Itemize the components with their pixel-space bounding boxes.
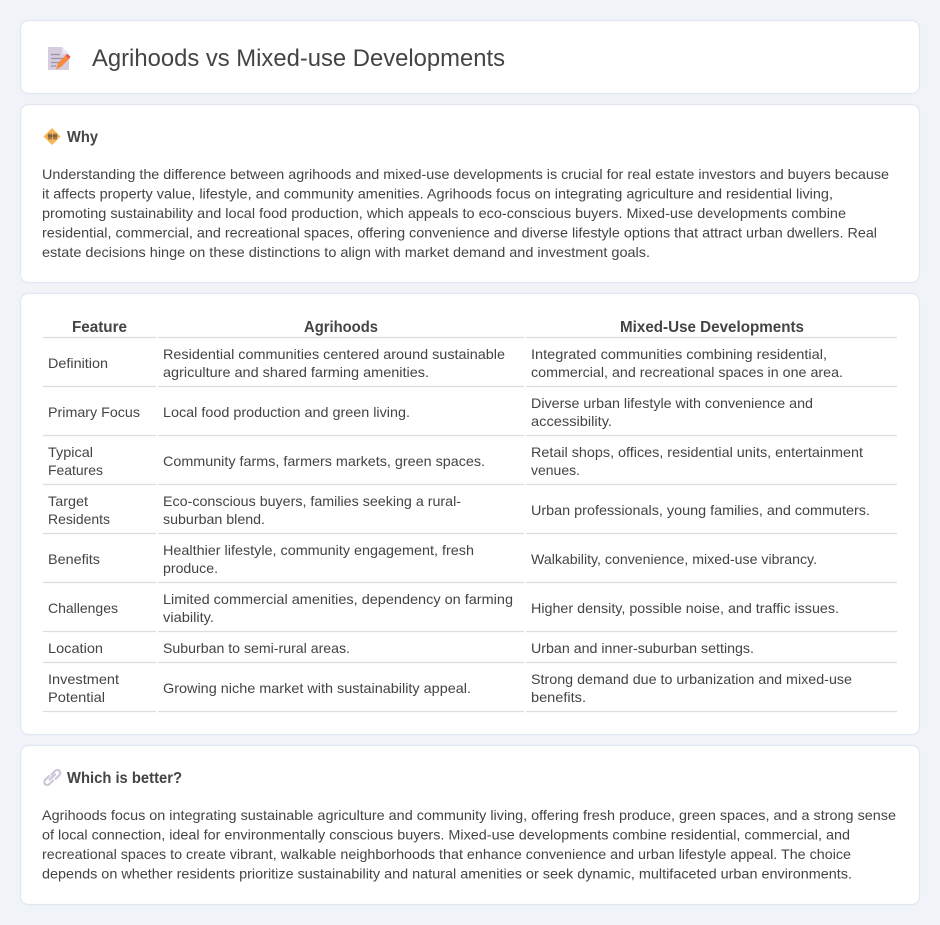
row: benefits: Benefits — [48, 551, 100, 567]
table header row: Mixed-Use Developments — [620, 319, 804, 336]
text block: which is better paragraph — [42, 807, 896, 882]
row: primary focus: Local food production and green living. — [163, 404, 410, 420]
text block: which is better paragraph: of local connection, ideal for environmentally conscious buyers. Mixed-use developments combine residential, commercial, and — [42, 826, 850, 842]
row: target residents — [43, 493, 897, 534]
row: target residents: suburban blend. — [163, 511, 265, 527]
row: target residents: Residents — [48, 511, 110, 527]
row: location — [43, 640, 897, 662]
row: benefits — [43, 542, 897, 582]
table header row: Feature — [72, 319, 127, 336]
row: typical features: venues. — [531, 462, 580, 478]
row: benefits: produce. — [163, 560, 218, 576]
row: definition: Integrated communities combining residential, — [531, 346, 827, 362]
row: primary focus: accessibility. — [531, 413, 612, 429]
panel: comparison table — [20, 294, 920, 734]
row: investment potential: Growing niche market with sustainability appeal. — [163, 680, 471, 696]
icon: orange diamond sign — [44, 128, 60, 145]
text block: why paragraph: estate decisions hinge on these distinctions to align with market demand and investment goals. — [42, 244, 650, 260]
row: definition: agriculture and shared farming amenities. — [163, 364, 429, 380]
text block: which is better paragraph: depends on whether residents prioritize sustainability and natural amenities or seek dynamic, multifaceted urban environments. — [42, 866, 852, 882]
row: definition: commercial, and recreational spaces in one area. — [531, 364, 843, 380]
icon: memo with pencil — [48, 47, 70, 70]
row: typical features: Community farms, farmers markets, green spaces. — [163, 453, 485, 469]
text block: which is better paragraph: Agrihoods focus on integrating sustainable agriculture and community living, offering fresh produce, green spaces, and a strong sense — [42, 807, 896, 823]
row: investment potential — [43, 671, 897, 712]
row: challenges: viability. — [163, 609, 214, 625]
panel: which is better — [20, 746, 920, 904]
table header row — [43, 319, 897, 338]
table header row: Agrihoods — [304, 319, 378, 336]
text block: why paragraph: residential, commercial, and recreational spaces, offering convenience and diverse lifestyle options that attract urban dwellers. Real — [42, 224, 877, 240]
text block: which is better paragraph: recreational spaces to create vibrant, walkable neighborhoods that enhance convenience and urban lifestyle appeal. The choice — [42, 846, 851, 862]
row: typical features — [43, 444, 897, 484]
panel: title header — [20, 20, 920, 94]
row: investment potential: Strong demand due to urbanization and mixed-use — [531, 671, 852, 687]
row: target residents: Eco-conscious buyers, families seeking a rural- — [163, 493, 461, 509]
text block: why paragraph — [42, 166, 889, 260]
row: typical features: Retail shops, offices, residential units, entertainment — [531, 444, 863, 460]
row: challenges: Higher density, possible noise, and traffic issues. — [531, 600, 839, 616]
row: benefits: Healthier lifestyle, community engagement, fresh — [163, 542, 474, 558]
row: investment potential: Potential — [48, 689, 105, 705]
row: benefits: Walkability, convenience, mixed-use vibrancy. — [531, 551, 817, 567]
row: location: Location — [48, 640, 103, 656]
row: primary focus: Diverse urban lifestyle with convenience and — [531, 395, 813, 411]
icon: chain link — [44, 770, 60, 785]
title: Agrihoods vs Mixed-use Developments — [92, 45, 505, 72]
heading: which is better: Which is better? — [67, 770, 182, 787]
text block: why paragraph: Understanding the difference between agrihoods and mixed-use developments is crucial for real estate investors and buyers because — [42, 166, 889, 182]
row: definition — [43, 346, 897, 386]
row: location: Suburban to semi-rural areas. — [163, 640, 350, 656]
panel: why — [20, 104, 920, 282]
row: challenges — [43, 591, 897, 632]
row: target residents: Target — [48, 493, 88, 509]
row: investment potential: Investment — [48, 671, 119, 687]
text block: why paragraph: it affects property value, lifestyle, and community amenities. Agrihoods focus on integrating agriculture and residential living, — [42, 186, 833, 202]
text block: why paragraph: promoting sustainability and local food production, which appeals to eco-conscious buyers. Mixed-use developments combine — [42, 205, 846, 221]
row: typical features: Typical — [48, 444, 93, 460]
row: typical features: Features — [48, 462, 103, 478]
row: primary focus: Primary Focus — [48, 404, 140, 420]
row: definition: Definition — [48, 355, 108, 371]
row: challenges: Challenges — [48, 600, 118, 616]
row: location: Urban and inner-suburban settings. — [531, 640, 754, 656]
row: challenges: Limited commercial amenities, dependency on farming — [163, 591, 513, 607]
row: target residents: Urban professionals, young families, and commuters. — [531, 502, 870, 518]
row: investment potential: benefits. — [531, 689, 586, 705]
row: primary focus — [43, 395, 897, 436]
row: definition: Residential communities centered around sustainable — [163, 346, 505, 362]
heading: why: Why — [67, 129, 98, 146]
